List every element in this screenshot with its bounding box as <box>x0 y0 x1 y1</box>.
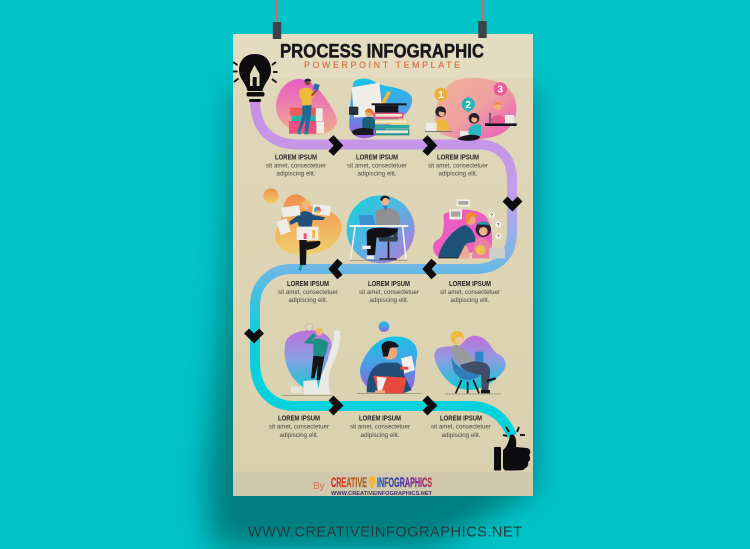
website url: WWW.CREATIVEINFOGRAPHICS.NET <box>248 524 522 540</box>
step captions row 1: LOREM IPSUM <box>275 154 317 162</box>
step 3 illustration: three people: 2 <box>466 100 472 111</box>
step captions row 2: adipiscing elit. <box>370 297 409 304</box>
step captions row 1 <box>266 154 489 178</box>
step captions row 3: sit amet, consectetuer <box>431 424 492 431</box>
step captions row 2: adipiscing elit. <box>288 297 328 304</box>
step captions row 3: adipiscing elit. <box>442 432 481 439</box>
step 2 illustration: studying with books <box>349 79 412 138</box>
poster <box>233 34 533 496</box>
step 6 illustration: couple with laptop <box>433 199 505 258</box>
step 5 illustration: person at desk <box>347 195 415 263</box>
step 7 illustration: person with long paper <box>282 323 340 396</box>
step captions row 3: LOREM IPSUM <box>359 416 401 423</box>
footer logo: INFOGRAPHICS <box>377 475 432 490</box>
subtitle: POWERPOINT TEMPLATE <box>304 60 460 70</box>
step captions row 3: adipiscing elit. <box>280 432 319 439</box>
step captions row 1: sit amet, consectetuer <box>266 162 327 170</box>
step 3 illustration: three people <box>425 78 517 141</box>
step captions row 1: LOREM IPSUM <box>356 154 398 162</box>
footer credit: by: By <box>313 481 325 492</box>
step captions row 2: sit amet, consectetuer <box>440 289 501 296</box>
footer logo: WWW.CREATIVEINFOGRAPHICS.NET <box>331 491 433 497</box>
icon: thumbs up <box>494 427 530 470</box>
step captions row 3 <box>269 416 492 439</box>
step captions row 1: LOREM IPSUM <box>437 154 479 162</box>
step 6 illustration: couple with laptop: ? <box>497 222 500 227</box>
step captions row 2 <box>278 281 501 304</box>
footer logo: CREATIVE <box>331 475 367 490</box>
step 4 illustration: person with charts <box>263 188 342 271</box>
step captions row 2: LOREM IPSUM <box>287 281 329 288</box>
icon: light bulb <box>233 54 278 102</box>
step captions row 3: LOREM IPSUM <box>278 416 320 423</box>
poster shadow <box>206 90 533 549</box>
process road <box>255 100 512 436</box>
step captions row 1: adipiscing elit. <box>276 170 316 178</box>
step 3 illustration: three people: 1 <box>438 90 444 101</box>
hanging clips <box>273 0 487 39</box>
step captions row 2: sit amet, consectetuer <box>278 289 339 296</box>
chevrons <box>246 138 520 413</box>
step 6 illustration: couple with laptop: ? <box>490 213 493 218</box>
step 3 illustration: three people: 3 <box>498 85 504 96</box>
step captions row 1: sit amet, consectetuer <box>347 162 408 170</box>
step 1 illustration: person on books <box>276 79 337 135</box>
step captions row 2: LOREM IPSUM <box>368 281 410 288</box>
step captions row 3: sit amet, consectetuer <box>269 424 330 431</box>
step captions row 3: adipiscing elit. <box>360 432 400 439</box>
footer logo <box>331 475 433 497</box>
step captions row 1: adipiscing elit. <box>358 170 397 178</box>
step 6 illustration: couple with laptop: ? <box>497 234 500 239</box>
step captions row 3: LOREM IPSUM <box>440 416 482 423</box>
step captions row 2: sit amet, consectetuer <box>359 289 420 296</box>
step captions row 2: adipiscing elit. <box>450 297 490 304</box>
step captions row 3: sit amet, consectetuer <box>350 424 411 431</box>
step captions row 2: LOREM IPSUM <box>449 281 491 288</box>
step captions row 1: adipiscing elit. <box>438 170 478 178</box>
step 8 illustration: person with folder <box>357 321 422 394</box>
step 9 illustration: person in chair <box>434 331 506 394</box>
title: PROCESS INFOGRAPHIC <box>280 41 484 62</box>
step captions row 1: sit amet, consectetuer <box>428 162 489 170</box>
